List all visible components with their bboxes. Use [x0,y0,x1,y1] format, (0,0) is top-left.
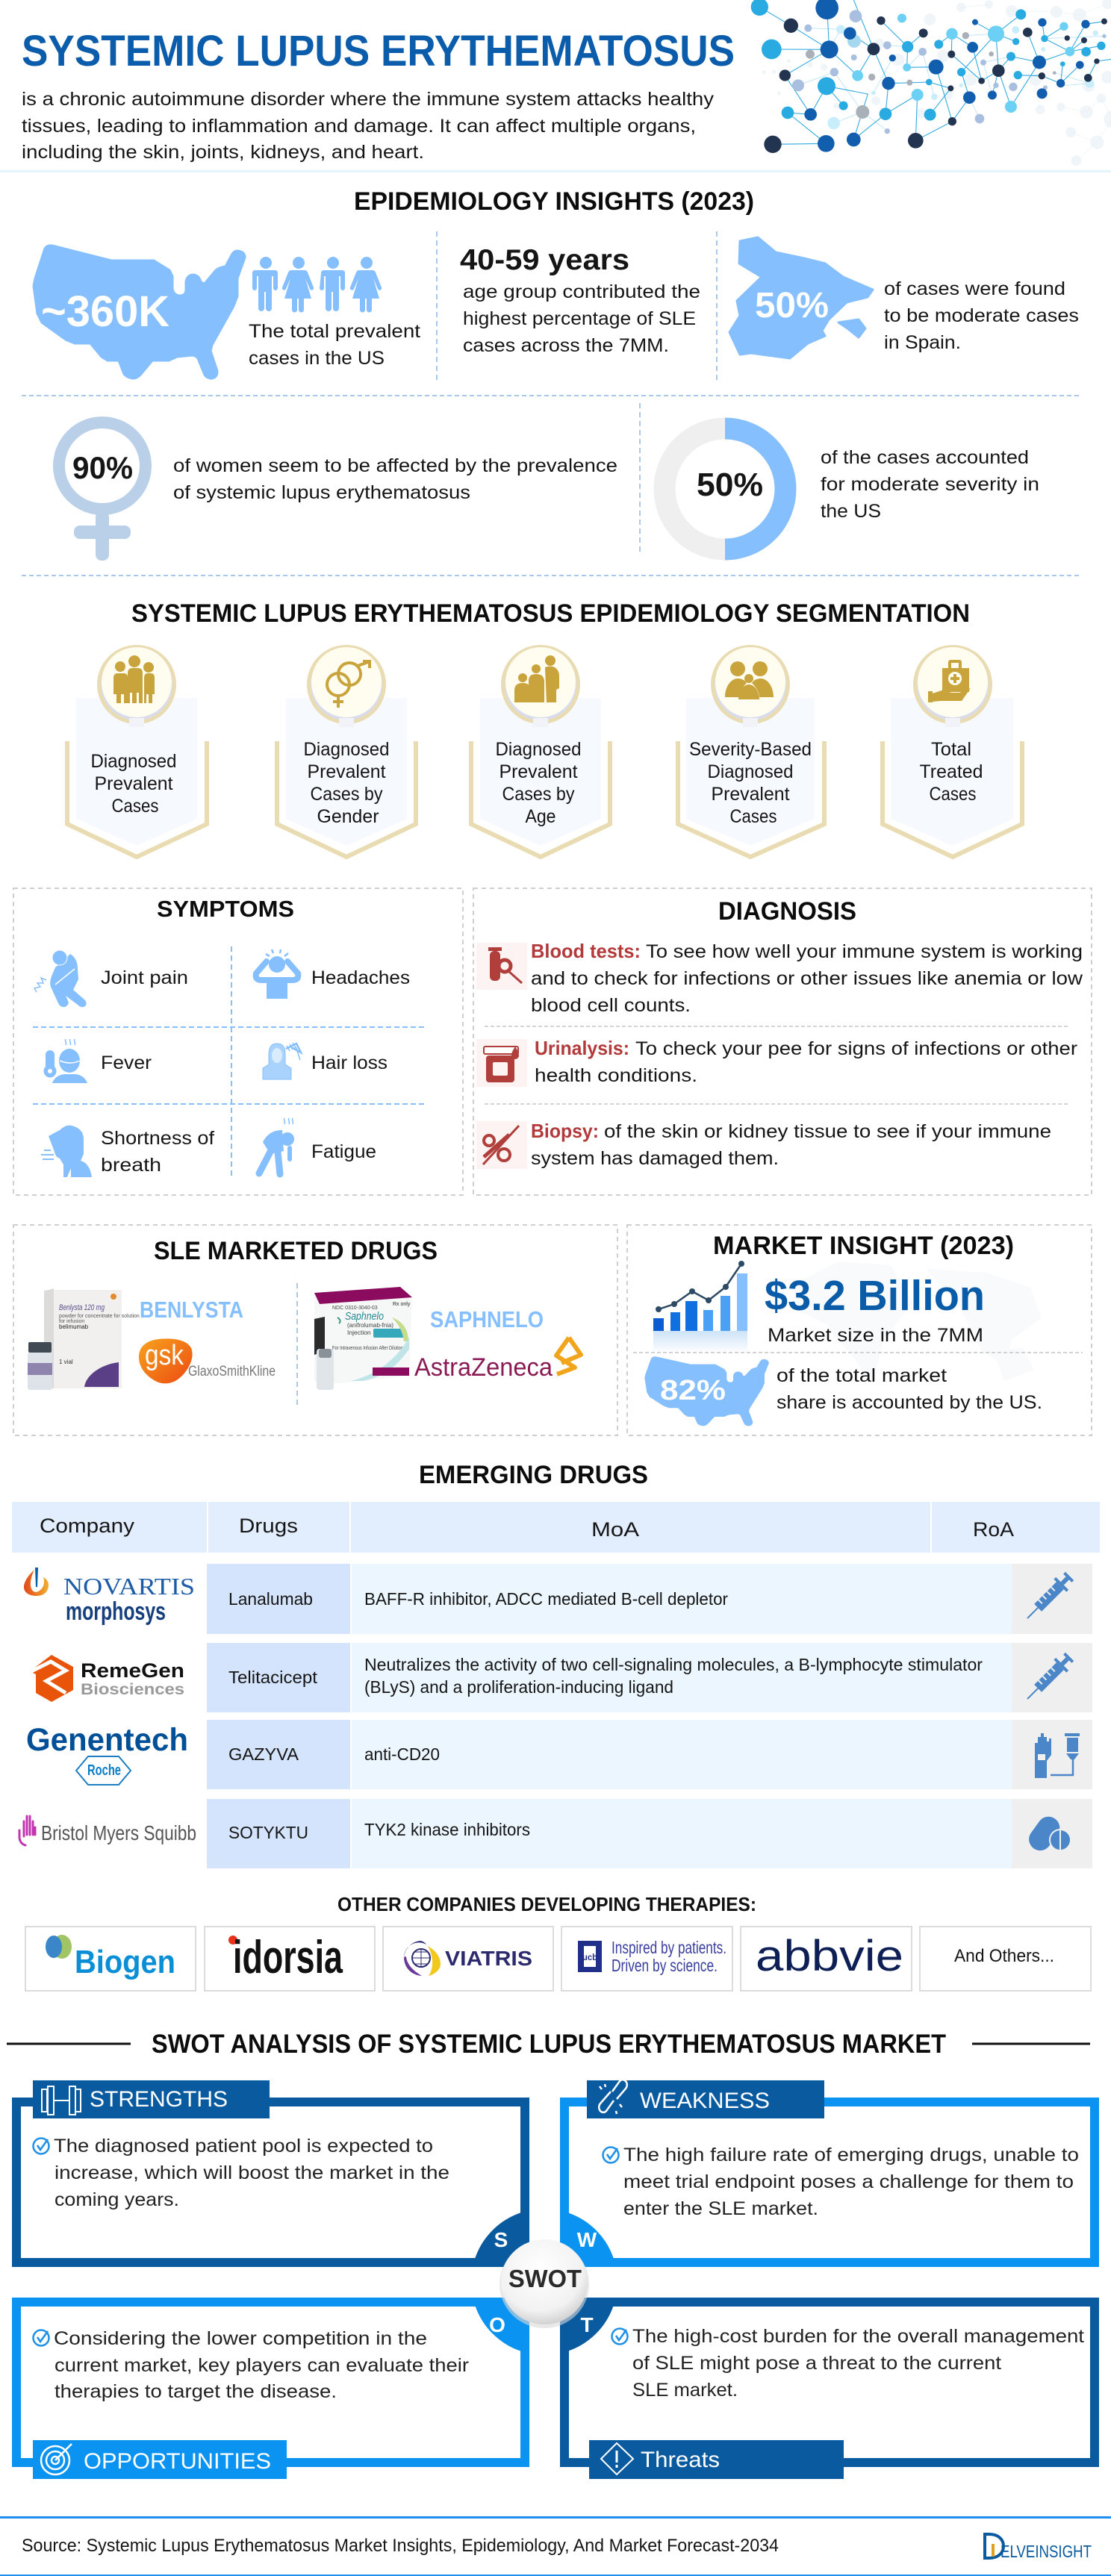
diagnosis: blood tests: blood cell counts. [531,995,691,1016]
logo: UCB: Driven by science. [611,1956,718,1975]
logo: Bristol Myers Squibb: Bristol Myers Squibb [41,1821,196,1844]
stat: 360K US cases: The total prevalent [249,321,420,342]
tab: threats: Threats [641,2448,720,2472]
logo: Genentech Roche [26,1722,188,1785]
intro text: including the skin, joints, kidneys, and heart. [22,142,424,163]
symptom: fever: Fever [101,1052,152,1073]
panel: market insight [627,1225,1092,1435]
icon: check [603,2147,618,2163]
Saphnelo package: (anifrolumab-fnia) [347,1321,393,1329]
symptom: shortness of breath: Shortness of [101,1128,214,1149]
Saphnelo package: Rx only [393,1302,411,1307]
logo: AbbVie [741,1927,912,1991]
logo: Idorsia: idorsia [233,1932,343,1983]
segment: total treated [883,645,1022,857]
symptom: headaches [256,949,410,999]
stat: 40-59 years: highest percentage of SLE [463,308,696,329]
quadrant: strengths: coming years. [55,2189,179,2210]
quadrant: weakness: The high failure rate of emerging drugs, unable to [623,2145,1079,2165]
stat: Spain 50%: to be moderate cases [884,305,1079,326]
quadrant: weakness: meet trial endpoint poses a challenge for them to [623,2171,1074,2192]
icon: age group [514,655,559,702]
icon: people [252,257,382,313]
table header [12,1500,1100,1553]
tab: threats [589,2440,844,2479]
symptom: joint pain: Joint pain [101,967,188,988]
Benlysta package: powder for concentrate for solution [59,1314,140,1319]
logo: AbbVie: abbvie [756,1932,903,1980]
diagnosis: biopsy: system has damaged them. [531,1148,779,1169]
diagnosis: urinalysis: To check your pee for signs of infections or other [635,1038,1077,1059]
Saphnelo package: For Intravenous Infusion After Dilution [332,1346,403,1351]
panel: other companies [25,1893,1091,1991]
row: Sotyktu [19,1799,1092,1868]
heading: other companies: OTHER COMPANIES DEVELOPING THERAPIES: [337,1893,756,1915]
logo: Viatris: VIATRIS [445,1947,532,1970]
logo: RemeGen: Biosciences [81,1681,184,1698]
stat: 50% moderate severity [665,428,1039,549]
Saphnelo package: Injection [347,1329,371,1336]
segment: by gender: Cases by [311,784,383,805]
Benlysta package: Benlysta 120 mg [59,1303,105,1312]
row: Sotyktu: SOTYKTU [228,1823,308,1842]
diagnosis: biopsy: of the skin or kidney tissue to see if your immune [604,1121,1051,1142]
drug: Benlysta [28,1288,276,1390]
segment: by age [471,645,610,857]
tab: strengths [33,2080,270,2118]
diagnosis: blood tests: To see how well your immune system is working [646,941,1083,962]
logo: Genentech Roche: Roche [87,1762,121,1779]
icon: IV infusion [1035,1733,1080,1778]
quadrant: strengths: increase, which will boost the market in the [55,2162,449,2183]
icon: syringe [1021,1650,1076,1705]
segment: severity-based: Diagnosed [708,761,793,782]
segment: severity-based: Prevalent [711,784,790,805]
icon: joint pain [34,950,87,1007]
heading: epidemiology: EPIDEMIOLOGY INSIGHTS (2023) [354,187,754,216]
quadrant: strengths: The diagnosed patient pool is expected to [54,2136,433,2156]
row: Sotyktu: TYK2 kinase inhibitors [364,1820,530,1839]
logo: GSK: GlaxoSmithKline [188,1364,276,1379]
panel: diagnosis [473,888,1092,1195]
quadrant: opportunities: Considering the lower competition in the [54,2328,427,2349]
stat: 360K US cases: cases in the US [249,348,385,369]
SWOT center badge [500,2239,589,2328]
row: Lanalumab: Lanalumab [228,1589,313,1609]
quadrant: strengths [12,2080,529,2267]
segment: severity-based [678,645,824,857]
icon: check [33,2138,49,2154]
stat: 90% women [59,422,617,561]
quadrant: weakness [560,2080,1099,2267]
quadrant: opportunities: O [489,2313,505,2336]
logo: RemeGen: RemeGen [81,1659,184,1682]
segment: by gender: Gender [317,806,379,827]
molecule network decoration [751,0,1111,166]
diagnosis: blood tests: and to check for infections or other issues like anemia or low [531,968,1083,989]
icon: check [33,2330,49,2345]
logo: Genentech Roche: Genentech [26,1722,188,1758]
quadrant: threats: of SLE might pose a threat to the current [632,2353,1001,2374]
quadrant: threats: The high-cost burden for the overall management [632,2326,1084,2347]
title: SYSTEMIC LUPUS ERYTHEMATOSUS [22,27,735,75]
segment: diagnosed prevalent cases: Prevalent [94,773,173,794]
logo: GSK [139,1338,276,1383]
stat: Spain 50%: in Spain. [884,332,961,353]
footer [0,2516,1111,2576]
icon: US map [34,246,245,378]
segment: severity-based: Severity-Based [689,739,812,760]
icon: female symbol [59,422,146,561]
icon: hand with medicine kit [928,660,971,702]
quadrant: threats: SLE market. [632,2380,738,2401]
row: Lanalumab: BAFF-R inhibitor, ADCC mediated B-cell depletor [364,1589,728,1609]
stat: 360K US cases [34,246,420,378]
logo: Biogen: Biogen [75,1944,175,1980]
stat: 50% moderate severity: the US [821,501,881,522]
segment: by age: Prevalent [499,761,578,782]
segment: by gender: Prevalent [308,761,386,782]
stat: 90% women: of systemic lupus erythematosus [173,482,470,503]
segment: total treated: Cases [929,784,977,805]
market share US [645,1357,1042,1426]
heading: segmentation: SYSTEMIC LUPUS ERYTHEMATOSUS EPIDEMIOLOGY SEGMENTATION [131,599,970,628]
stat: 90% women: 90% [72,450,133,485]
market size value [765,1272,985,1346]
heading: diagnosis: DIAGNOSIS [718,897,856,926]
heading: symptoms: SYMPTOMS [157,896,294,922]
diagnosis: blood tests [476,940,1083,1016]
icon: urine sample [476,1039,527,1087]
table header: Drugs [239,1515,298,1537]
icon: gender symbols [327,661,370,708]
diagnosis: urinalysis: Urinalysis: [535,1037,629,1059]
donut chart [665,428,785,549]
Benlysta package [28,1288,140,1390]
diagnosis: urinalysis [476,1037,1077,1087]
market size value: Market size in the 7MM [768,1325,983,1346]
icon: shortness of breath [41,1126,92,1177]
icon: check [612,2329,627,2344]
segment: diagnosed prevalent cases: Diagnosed [91,751,176,772]
tab: strengths: STRENGTHS [90,2087,228,2112]
table header: RoA [973,1518,1014,1541]
row: Telitacicept [30,1643,1092,1712]
symptom: hair loss [263,1043,388,1079]
Benlysta package: belimumab [59,1323,89,1330]
logo: Bristol Myers Squibb [19,1816,196,1845]
diagnosis: biopsy: Biopsy: [531,1120,599,1142]
header banner [22,0,1111,166]
intro text: is a chronic autoimmune disorder where the immune system attacks healthy [22,89,715,110]
logo: DelveInsight: ELVEINSIGHT [1000,2542,1092,2561]
diagnosis: blood tests: Blood tests: [531,940,641,962]
logo: UCB: ucb [582,1952,597,1962]
segment: by age: Cases by [502,784,575,805]
source text: Source: Systemic Lupus Erythematosus Market Insights, Epidemiology, And Market Forecast-2034 [22,2536,779,2556]
row: Gazyva [26,1720,1092,1789]
stat: 40-59 years [460,244,700,356]
quadrant: opportunities: current market, key players can evaluate their [55,2355,469,2376]
stat: 50% moderate severity: of the cases accounted [821,447,1029,468]
symptom: shortness of breath: breath [101,1155,161,1176]
segment: by age: Diagnosed [496,739,581,760]
Benlysta package: 1 vial [59,1359,73,1365]
quadrant: threats [560,2298,1099,2479]
Saphnelo package [314,1287,412,1390]
box: and others: And Others... [954,1946,1054,1966]
stat: 90% women: of women seem to be affected by the prevalence [173,455,617,476]
market share US: of the total market [777,1365,947,1386]
logo: Viatris [383,1927,553,1991]
row: Telitacicept: Neutralizes the activity of two cell-signaling molecules, a B-lymphocyte stimulator [364,1655,983,1674]
panel: emerging drugs table [12,1461,1100,1868]
panel: SLE marketed drugs [13,1225,617,1435]
drug: Benlysta: BENLYSTA [140,1297,243,1323]
tab: opportunities: OPPORTUNITIES [84,2449,271,2474]
panel: SWOT analysis [7,2030,1095,2479]
stat: 40-59 years: 40-59 years [460,244,629,276]
quadrant: weakness: W [577,2228,597,2251]
quadrant: threats: T [580,2313,594,2336]
logo: AstraZeneca: AstraZeneca [414,1353,553,1382]
segment: by gender [277,645,416,857]
table header: MoA [591,1518,639,1541]
box: and others [920,1927,1091,1991]
tab: opportunities [33,2440,287,2479]
icon: US map small [645,1357,768,1426]
row: Telitacicept: (BLyS) and a proliferation-inducing ligand [364,1677,673,1697]
quadrant: opportunities [12,2298,529,2479]
stat: 40-59 years: age group contributed the [463,281,700,302]
segment: severity-based: Cases [730,806,777,827]
quadrant: opportunities: therapies to target the disease. [55,2381,337,2402]
icon: pills [1024,1812,1071,1855]
symptom: fatigue [259,1118,376,1174]
row: Telitacicept: Telitacicept [228,1668,318,1687]
panel: epidemiology insights [22,187,1079,576]
quadrant: weakness: enter the SLE market. [623,2198,818,2219]
logo: Idorsia [205,1927,375,1991]
heading: marketed drugs: SLE MARKETED DRUGS [154,1237,438,1265]
icon: biopsy [476,1121,527,1169]
tab: weakness [587,2080,824,2118]
symptom: fever [43,1039,152,1083]
logo: Novartis MorphoSys [24,1568,195,1626]
logo: Biogen [25,1927,196,1991]
icon: fatigue [259,1118,294,1174]
row: Gazyva: GAZYVA [228,1744,299,1764]
row: Gazyva: anti-CD20 [364,1744,440,1764]
diagnosis: biopsy [476,1120,1051,1169]
bar chart: market growth [653,1261,747,1353]
segment: diagnosed prevalent cases: Cases [112,796,158,817]
market share US: share is accounted by the US. [777,1392,1042,1413]
logo: GSK: gsk [145,1340,184,1371]
SWOT center badge: SWOT [508,2265,582,2292]
logo: AstraZeneca [414,1338,581,1382]
panel: symptoms [13,888,463,1195]
stat: Spain 50%: 50% [755,286,829,325]
icon: blood test [476,943,527,990]
heading: market insight: MARKET INSIGHT (2023) [713,1232,1014,1260]
diagnosis: urinalysis: health conditions. [535,1065,697,1086]
icon: headache [256,949,298,999]
logo: DelveInsight [985,2534,1092,2561]
drug: Saphnelo: SAPHNELO [430,1306,544,1332]
panel: epidemiology segmentation [67,599,1022,857]
row: Lanalumab [24,1564,1092,1634]
icon: fever [43,1039,87,1083]
icon: hair loss [263,1043,301,1079]
icon: Spain map [729,237,873,358]
Saphnelo package: Saphnelo [345,1310,384,1323]
Saphnelo package: NDC 0310-3040-03 [332,1306,378,1311]
segment: by gender: Diagnosed [303,739,390,760]
heading: emerging drugs: EMERGING DRUGS [419,1461,648,1489]
Benlysta package: for infusion [59,1319,84,1324]
icon: severity group [725,661,774,699]
logo: Novartis MorphoSys: NOVARTIS [63,1573,195,1600]
icon: syringe [1021,1570,1076,1624]
logo: RemeGen [30,1655,184,1702]
symptom: shortness of breath [41,1126,214,1177]
segment: diagnosed prevalent cases [67,645,207,857]
symptom: hair loss: Hair loss [311,1052,388,1073]
stat: 40-59 years: cases across the 7MM. [463,335,669,356]
symptom: joint pain [34,950,188,1007]
segment: total treated: Treated [920,761,983,782]
intro text [22,89,715,163]
drug: Saphnelo [314,1287,581,1390]
stat: 50% moderate severity: 50% [697,467,763,503]
stat: 360K US cases: ~360K [41,287,169,336]
table header: Company [40,1515,135,1537]
stat: Spain 50%: of cases were found [884,278,1065,299]
stat: Spain 50% [729,237,1079,358]
logo: UCB [561,1927,732,1991]
icon: people [113,655,155,703]
stat: 50% moderate severity: for moderate severity in [821,474,1039,495]
symptom: headaches: Headaches [311,967,410,988]
intro text: tissues, leading to inflammation and damage. It can affect multiple organs, [22,116,696,137]
heading: SWOT: SWOT ANALYSIS OF SYSTEMIC LUPUS ERYTHEMATOSUS MARKET [152,2030,946,2059]
logo: UCB: Inspired by patients. [611,1938,726,1957]
market size value: $3.2 Billion [765,1272,985,1320]
tab: weakness: WEAKNESS [640,2089,770,2113]
segment: total treated: Total [931,739,971,760]
market share US: 82% [660,1375,726,1406]
quadrant: strengths: S [494,2228,508,2251]
logo: Novartis MorphoSys: morphosys [66,1597,166,1626]
segment: by age: Age [526,806,556,827]
symptom: fatigue: Fatigue [311,1141,376,1162]
